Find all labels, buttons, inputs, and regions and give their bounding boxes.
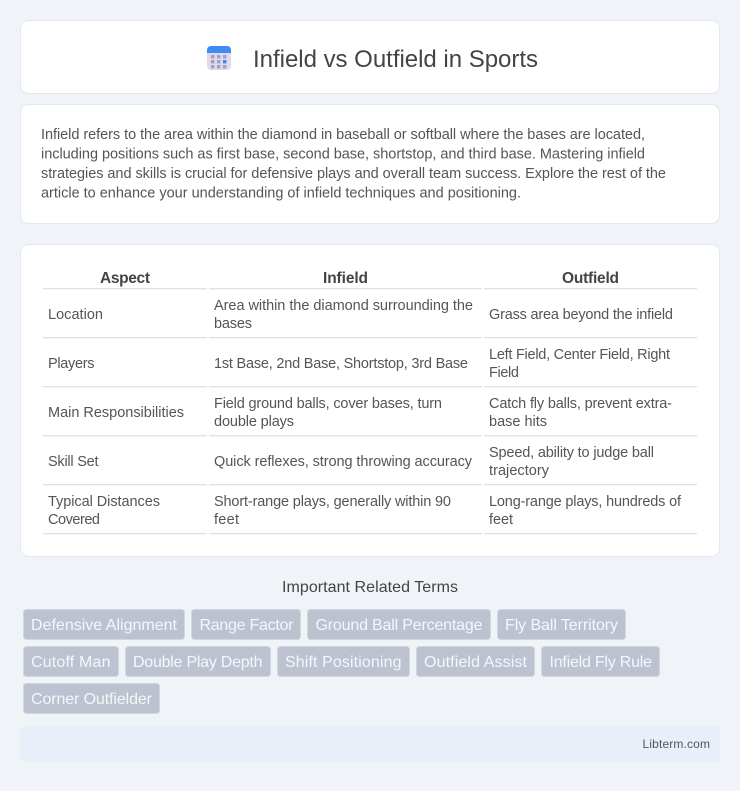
table row: skill set: Speed, ability to judge ball (489, 445, 654, 461)
table row: typical distances covered (48, 494, 682, 528)
table row: main responsibilities (48, 396, 672, 430)
tag: Defensive Alignment (24, 610, 184, 640)
table row: players: 1st Base, 2nd Base, Shortstop, 3rd Base (214, 356, 468, 372)
table header row (100, 270, 619, 287)
heading: important related terms: Important Related Terms (282, 579, 458, 596)
footer (20, 727, 720, 761)
text block: introduction paragraph (41, 127, 666, 202)
table row: location: bases (214, 316, 252, 332)
table row: location (48, 298, 673, 332)
tag: Fly Ball Territory (498, 610, 626, 640)
table row: typical distances covered: feet (214, 512, 239, 528)
text block: introduction paragraph: article to enhance your understanding of infield techniques and positioning. (41, 186, 521, 202)
table header row: Outfield (562, 270, 619, 287)
tag: Ground Ball Percentage (308, 610, 490, 640)
table row: players (48, 347, 670, 381)
panel: introduction (20, 104, 720, 224)
table row: typical distances covered: Long-range plays, hundreds of (489, 494, 682, 510)
tag: Fly Ball Territory: Fly Ball Territory (505, 617, 618, 634)
table row: typical distances covered: Covered (48, 512, 100, 528)
tag list: related terms (24, 610, 660, 714)
tag: Shift Positioning (278, 646, 410, 676)
tag: Range Factor: Range Factor (200, 617, 294, 634)
tag: Corner Outfielder: Corner Outfielder (31, 691, 153, 708)
footer credit: Libterm.com (642, 737, 710, 751)
table row: main responsibilities: Main Responsibilities (48, 405, 184, 421)
table row: main responsibilities: base hits (489, 414, 547, 430)
text block: introduction paragraph: including positions such as first base, second base, shortstop, and third base. Mastering infield (41, 146, 645, 162)
tag: Double Play Depth (126, 646, 270, 676)
tag: Double Play Depth: Double Play Depth (133, 654, 262, 671)
tag: Cutoff Man: Cutoff Man (31, 654, 110, 671)
tag: Outfield Assist: Outfield Assist (424, 654, 528, 671)
table row: players: Players (48, 356, 94, 372)
tag: Infield Fly Rule: Infield Fly Rule (550, 654, 652, 671)
table row: main responsibilities: double plays (214, 414, 294, 430)
table row: typical distances covered: Short-range plays, generally within 90 (214, 494, 451, 510)
tag: Ground Ball Percentage: Ground Ball Percentage (316, 617, 483, 634)
table row: skill set: trajectory (489, 463, 550, 479)
panel: comparison table (20, 244, 720, 556)
table header row: Aspect (100, 270, 150, 287)
tag: Shift Positioning: Shift Positioning (285, 654, 402, 671)
table row: skill set: Quick reflexes, strong throwing accuracy (214, 454, 473, 470)
table row: skill set: Skill Set (48, 454, 98, 470)
table row: location: Grass area beyond the infield (489, 307, 673, 323)
table row: typical distances covered: feet (489, 512, 513, 528)
table row: players: Left Field, Center Field, Right (489, 347, 670, 363)
tag: Outfield Assist (416, 646, 534, 676)
table row: main responsibilities: Field ground balls, cover bases, turn (214, 396, 442, 412)
text block: introduction paragraph: Infield refers to the area within the diamond in baseball or softball where the bases are located, (41, 127, 645, 143)
tag: Defensive Alignment: Defensive Alignment (31, 617, 178, 634)
tag: Range Factor (192, 610, 300, 640)
tag: Infield Fly Rule (542, 646, 660, 676)
table row: location: Location (48, 307, 103, 323)
title: Infield vs Outfield in Sports (253, 46, 538, 73)
icon: calendar grid (207, 46, 231, 70)
panel: title header (20, 20, 720, 94)
tag: Corner Outfielder (24, 684, 160, 714)
table row: players: Field (489, 365, 519, 381)
tag: Cutoff Man (24, 646, 118, 676)
table row: location: Area within the diamond surrounding the (214, 298, 473, 314)
table row: typical distances covered: Typical Distances (48, 494, 160, 510)
table row: skill set (48, 445, 654, 479)
table row: main responsibilities: Catch fly balls, prevent extra- (489, 396, 672, 412)
text block: introduction paragraph: strategies and skills is crucial for defensive plays and overall team success. Explore the rest of the (41, 166, 666, 182)
table header row: Infield (323, 270, 368, 287)
